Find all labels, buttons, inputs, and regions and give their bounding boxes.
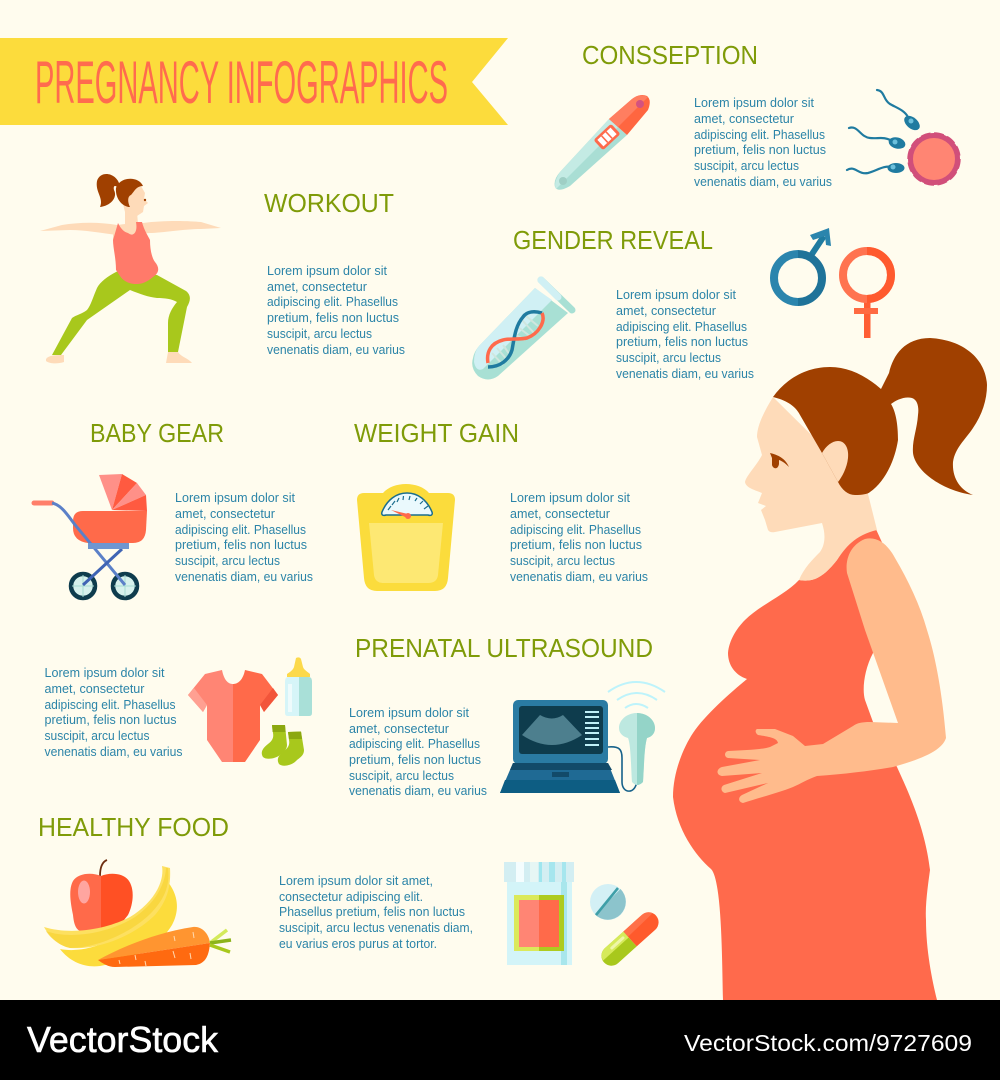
icon: baby bottle bbox=[285, 657, 312, 716]
title banner: PREGNANCY INFOGRAPHICS bbox=[35, 49, 448, 116]
panel: consception bbox=[555, 40, 960, 190]
text block: weight gain: venenatis diam, eu varius bbox=[510, 569, 648, 584]
icon: pregnancy test bbox=[555, 95, 650, 190]
text block: baby clothes: pretium, felis non luctus bbox=[44, 712, 177, 727]
icon: male symbol bbox=[774, 228, 831, 302]
panel: gender reveal bbox=[472, 225, 891, 381]
icon: yoga pose woman bbox=[40, 174, 221, 363]
text block: gender reveal: Lorem ipsum dolor sit bbox=[616, 287, 736, 302]
text block: prenatal ultrasound: suscipit, arcu lectus bbox=[349, 768, 454, 783]
text block: healthy food: eu varius eros purus at tortor. bbox=[279, 936, 437, 951]
text block: workout bbox=[267, 263, 405, 357]
text block: healthy food: Lorem ipsum dolor sit amet, bbox=[279, 873, 433, 888]
text block: gender reveal: amet, consectetur bbox=[616, 303, 717, 318]
text block: gender reveal: suscipit, arcu lectus bbox=[616, 350, 721, 365]
text block: gender reveal bbox=[616, 287, 754, 381]
icon: pills bbox=[590, 884, 663, 970]
text block: baby clothes: venenatis diam, eu varius bbox=[44, 744, 183, 759]
icon: baby socks bbox=[262, 725, 304, 766]
panel: weight gain bbox=[354, 418, 648, 591]
text block: consception: Lorem ipsum dolor sit bbox=[694, 95, 814, 110]
text block: gender reveal: venenatis diam, eu varius bbox=[616, 366, 754, 381]
icon: female symbol bbox=[843, 251, 891, 338]
text block: baby gear: venenatis diam, eu varius bbox=[175, 569, 313, 584]
text block: baby gear: suscipit, arcu lectus bbox=[175, 553, 280, 568]
footer image id: VectorStock.com/9727609 bbox=[684, 1030, 972, 1056]
main pregnant woman figure bbox=[673, 338, 987, 1000]
text block: prenatal ultrasound: amet, consectetur bbox=[349, 721, 450, 736]
text block: baby clothes: amet, consectetur bbox=[44, 681, 145, 696]
icon: stroller bbox=[34, 474, 147, 598]
text block: consception bbox=[694, 95, 832, 189]
text block: baby gear bbox=[175, 490, 313, 584]
text block: consception: amet, consectetur bbox=[694, 111, 795, 126]
text block: healthy food: Phasellus pretium, felis non luctus bbox=[279, 904, 465, 919]
text block: baby clothes: suscipit, arcu lectus bbox=[44, 728, 150, 743]
panel: workout bbox=[40, 174, 405, 363]
text block: baby gear: adipiscing elit. Phasellus bbox=[175, 522, 306, 537]
text block: healthy food bbox=[279, 873, 473, 951]
text block: workout: amet, consectetur bbox=[267, 279, 368, 294]
text block: healthy food: suscipit, arcu lectus venenatis diam, bbox=[279, 920, 473, 935]
text block: weight gain: Lorem ipsum dolor sit bbox=[510, 490, 630, 505]
text block: workout: suscipit, arcu lectus bbox=[267, 326, 372, 341]
text block: consception: adipiscing elit. Phasellus bbox=[694, 127, 825, 142]
icon: DNA test tube bbox=[472, 280, 572, 380]
text block: weight gain bbox=[510, 490, 648, 584]
text block: weight gain: amet, consectetur bbox=[510, 506, 611, 521]
panel: healthy food bbox=[38, 812, 663, 970]
text block: prenatal ultrasound: adipiscing elit. Phasellus bbox=[349, 736, 480, 751]
arm and hand bbox=[718, 538, 946, 803]
text block: workout: Lorem ipsum dolor sit bbox=[267, 263, 387, 278]
text block: weight gain: suscipit, arcu lectus bbox=[510, 553, 615, 568]
heading: baby gear: BABY GEAR bbox=[90, 418, 224, 448]
text block: workout: adipiscing elit. Phasellus bbox=[267, 294, 398, 309]
text block: baby gear: Lorem ipsum dolor sit bbox=[175, 490, 295, 505]
text block: prenatal ultrasound: pretium, felis non luctus bbox=[349, 752, 481, 767]
hair and ponytail bbox=[773, 338, 987, 495]
text block: gender reveal: pretium, felis non luctus bbox=[616, 334, 748, 349]
icon: sperm and egg bbox=[847, 90, 960, 185]
icon: baby onesie bbox=[188, 670, 278, 762]
heading: healthy food: HEALTHY FOOD bbox=[38, 812, 229, 842]
heading: gender reveal: GENDER REVEAL bbox=[513, 225, 713, 255]
text block: baby clothes: Lorem ipsum dolor sit bbox=[44, 665, 165, 680]
text block: gender reveal: adipiscing elit. Phasellus bbox=[616, 319, 747, 334]
neck and face bbox=[745, 397, 877, 581]
heading: weight gain: WEIGHT GAIN bbox=[354, 418, 519, 448]
heading: prenatal ultrasound: PRENATAL ULTRASOUND bbox=[355, 633, 653, 663]
text block: consception: venenatis diam, eu varius bbox=[694, 174, 832, 189]
text block: baby clothes: adipiscing elit. Phasellus bbox=[44, 697, 176, 712]
icon: medicine bottle bbox=[504, 862, 574, 965]
text block: baby gear: pretium, felis non luctus bbox=[175, 537, 307, 552]
text block: consception: suscipit, arcu lectus bbox=[694, 158, 799, 173]
footer bar bbox=[0, 1000, 1000, 1080]
icon: fruit and vegetables bbox=[44, 860, 231, 967]
panel: baby gear bbox=[34, 418, 313, 598]
eye bbox=[770, 453, 789, 468]
dress bbox=[673, 527, 937, 1000]
footer logo: VectorStock bbox=[27, 1019, 219, 1060]
text block: weight gain: adipiscing elit. Phasellus bbox=[510, 522, 641, 537]
text block: prenatal ultrasound: venenatis diam, eu varius bbox=[349, 783, 487, 798]
icon: bathroom scale bbox=[357, 484, 455, 591]
text block: workout: venenatis diam, eu varius bbox=[267, 342, 405, 357]
text block: prenatal ultrasound: Lorem ipsum dolor sit bbox=[349, 705, 469, 720]
heading: workout: WORKOUT bbox=[264, 188, 394, 218]
text block: workout: pretium, felis non luctus bbox=[267, 310, 399, 325]
text block: prenatal ultrasound bbox=[349, 705, 487, 798]
heading: consception: CONSSEPTION bbox=[582, 40, 758, 70]
text block: healthy food: consectetur adipiscing elit. bbox=[279, 889, 423, 904]
text block: consception: pretium, felis non luctus bbox=[694, 142, 826, 157]
panel: baby clothes bbox=[44, 657, 312, 766]
text block: baby gear: amet, consectetur bbox=[175, 506, 276, 521]
icon: ultrasound machine bbox=[500, 682, 665, 793]
text block: baby clothes bbox=[44, 665, 183, 759]
panel: prenatal ultrasound bbox=[349, 633, 665, 798]
title banner bbox=[0, 38, 508, 125]
text block: weight gain: pretium, felis non luctus bbox=[510, 537, 642, 552]
ear bbox=[822, 441, 848, 482]
